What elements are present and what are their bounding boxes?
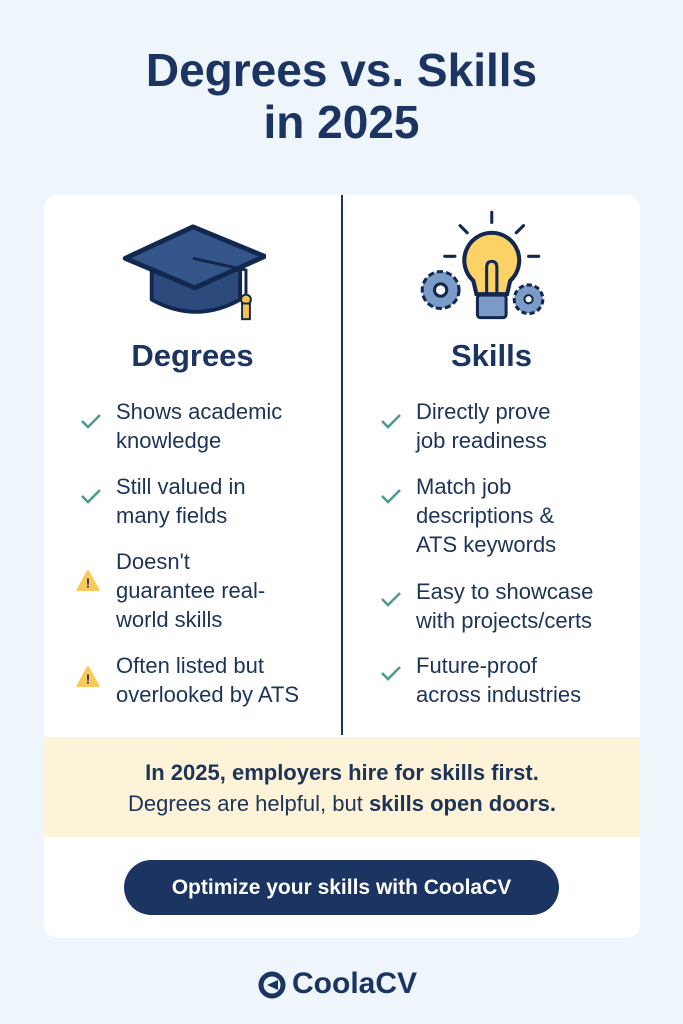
- icon: graduation cap: [122, 224, 266, 320]
- panel: comparison card: [44, 195, 640, 938]
- list: degrees: world skills: [116, 607, 222, 632]
- heading: Skills: Skills: [451, 338, 532, 373]
- list: skills: job readiness: [416, 428, 547, 453]
- list: skills: descriptions &: [416, 503, 554, 528]
- callout band: Degrees are helpful, but skills open doors.: [128, 791, 556, 816]
- list: degrees: many fields: [116, 503, 227, 528]
- list: degrees: Often listed but: [116, 653, 264, 678]
- icon: logo mark: [258, 972, 286, 998]
- button: CTA: Optimize your skills with CoolaCV: [172, 876, 511, 899]
- title: [146, 44, 537, 148]
- list: skills: [381, 399, 593, 707]
- list: skills: across industries: [416, 682, 581, 707]
- list: degrees: Doesn't: [116, 549, 190, 574]
- title: Degrees vs. Skills: [146, 44, 537, 96]
- list: degrees: overlooked by ATS: [116, 682, 299, 707]
- list: degrees: [76, 399, 299, 707]
- button: CTA: [124, 860, 559, 915]
- list: skills: Easy to showcase: [416, 579, 593, 604]
- list: degrees: guarantee real-: [116, 578, 265, 603]
- title: in 2025: [264, 96, 420, 148]
- list: skills: Directly prove: [416, 399, 550, 424]
- list: degrees: Still valued in: [116, 474, 246, 499]
- list: skills: ATS keywords: [416, 532, 556, 557]
- list: skills: Match job: [416, 474, 511, 499]
- list: skills: Future-proof: [416, 653, 537, 678]
- list: degrees: Shows academic: [116, 399, 282, 424]
- icon: lightbulb with gears: [420, 210, 544, 320]
- logo: CoolaCV: [292, 967, 417, 1000]
- heading: Degrees: Degrees: [131, 338, 254, 373]
- list: skills: with projects/certs: [416, 608, 592, 633]
- list: degrees: !: [86, 671, 90, 686]
- list: degrees: knowledge: [116, 428, 221, 453]
- callout band: In 2025, employers hire for skills first.: [145, 760, 539, 785]
- divider: [341, 195, 343, 735]
- callout band: [44, 737, 640, 837]
- list: degrees: !: [86, 575, 90, 590]
